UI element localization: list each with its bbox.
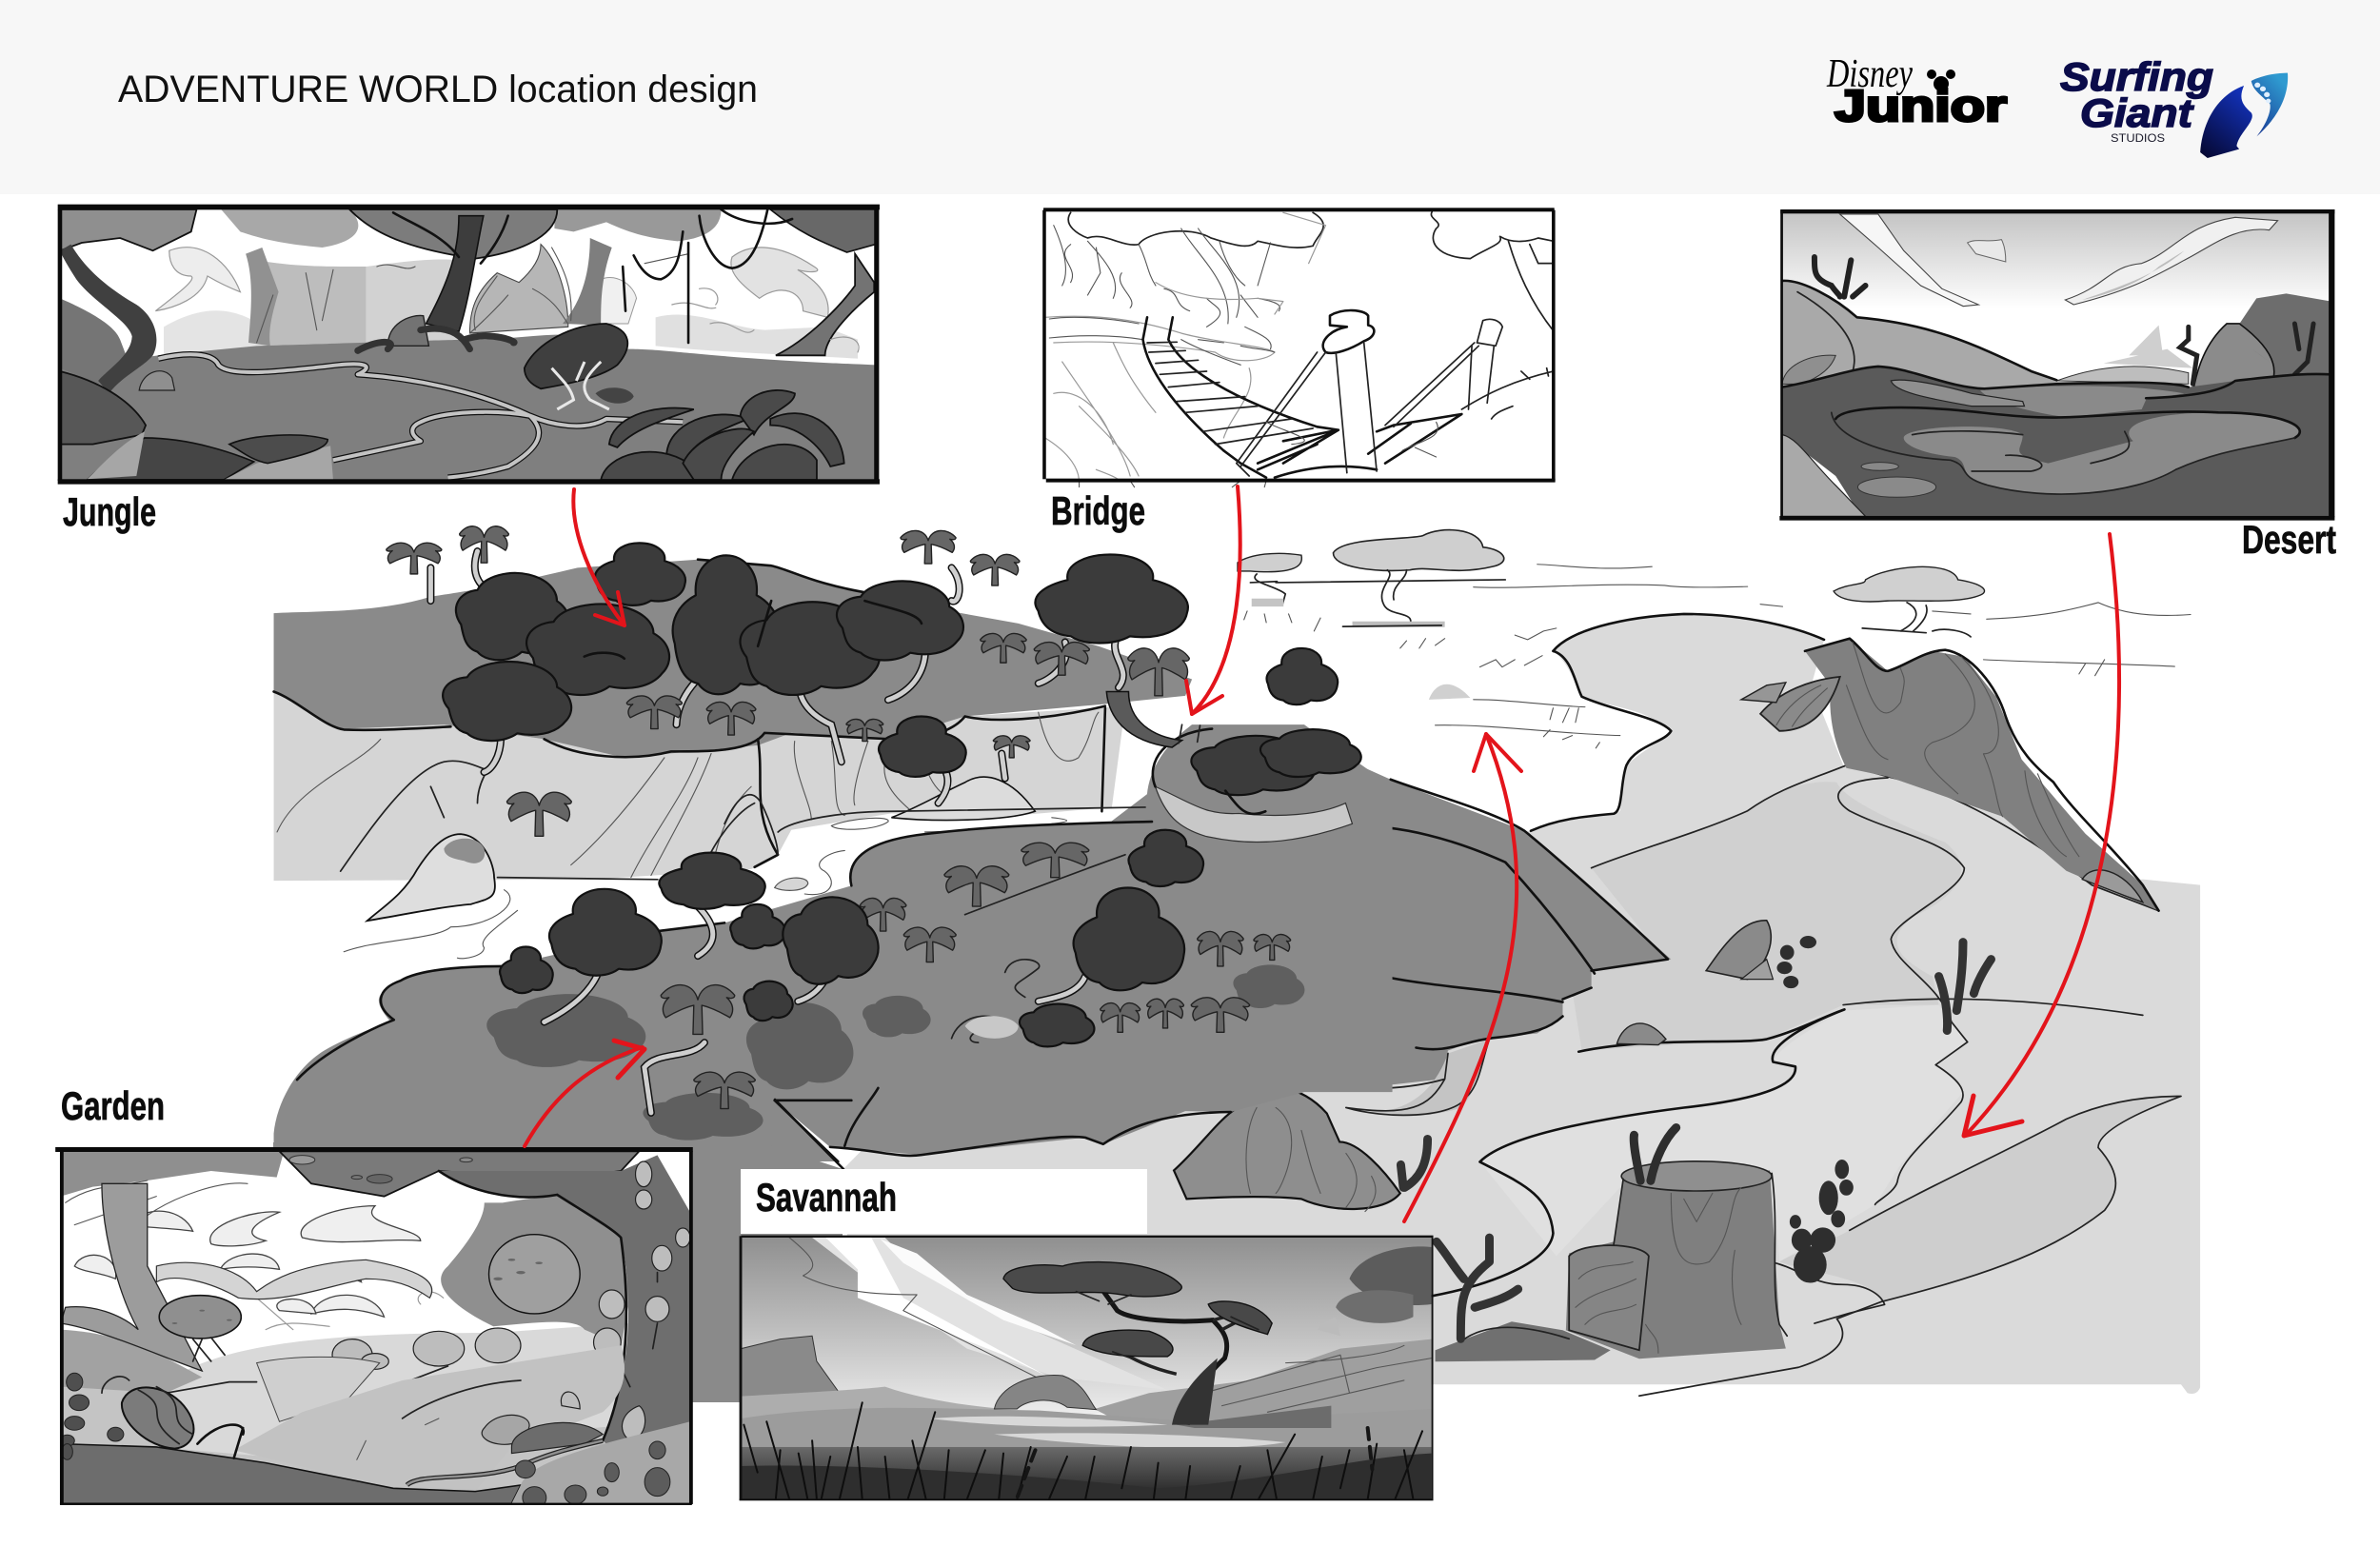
small rocks by cliff (1741, 677, 1840, 731)
label: Jungle: Jungle (63, 489, 156, 534)
label box: Savannah: Savannah (756, 1175, 897, 1220)
bridge frame (1042, 208, 1556, 483)
river ripples (344, 818, 1092, 959)
garden round fruit trees (489, 1235, 580, 1314)
title: ADVENTURE WORLD location design (118, 69, 758, 110)
background savannah tree small (1238, 553, 1505, 606)
garden trunks (61, 1183, 202, 1371)
garden bulb plants (332, 1161, 690, 1371)
right hillock bushes (1225, 791, 1265, 814)
arrow: desert (1964, 534, 2119, 1136)
garden swirling leaves (74, 1206, 421, 1317)
label: Bridge: Bridge (1051, 488, 1145, 533)
label: Desert: Desert (2242, 517, 2336, 562)
panel: main landscape map (273, 526, 2200, 1402)
gray hill below garden arrow (273, 1142, 843, 1402)
mid-gray foliage masses (486, 964, 1304, 1141)
label: Garden: Garden (61, 1083, 165, 1128)
background savannah tree right (1834, 566, 1985, 637)
panel: Garden (55, 1083, 693, 1509)
mid dune rock and stones (1616, 921, 1816, 1045)
label box: Savannah (741, 1169, 1147, 1234)
jungle canopies (221, 209, 358, 248)
garden pale ground (156, 1323, 630, 1457)
logo: Disney Junior: Disney (1826, 52, 1913, 96)
inner canopy detail (585, 601, 922, 659)
arrow: jungle (573, 489, 625, 625)
back plateau and garden hill (274, 526, 1393, 1161)
jungle trunks (246, 248, 279, 346)
logo: Surfing Giant Studios: Giant (2080, 90, 2194, 135)
logo: Surfing Giant Studios: Surfing (2060, 54, 2213, 99)
desert clouds (1840, 214, 1978, 307)
savannah right hills (1095, 1339, 1432, 1428)
central hill right part (1110, 725, 1671, 1087)
plateau foreground rocks (341, 761, 778, 880)
dark tree canopies (443, 543, 1361, 1046)
savannah left rocks (742, 1335, 838, 1397)
jungle frame (58, 205, 880, 485)
garden stump and ground path (257, 1357, 380, 1421)
cactus on dune line (1939, 942, 1991, 1031)
palm trees (387, 526, 1291, 1109)
sky horizon lines (1436, 565, 2191, 736)
arrow: bridge (1186, 486, 1240, 714)
arrow: garden (525, 1041, 645, 1146)
jungle big leaves plant (601, 390, 844, 480)
desert dark basin (1782, 367, 2331, 516)
bridge canopy and trees sketch (1068, 212, 1323, 248)
bridge posts (1323, 310, 1374, 353)
savannah distant dome tree (994, 1376, 1097, 1410)
plant beside savannah panel (1437, 1238, 1518, 1339)
rope bridge deck (1143, 317, 1318, 450)
logo: Surfing Giant Studios: STUDIOS (2111, 131, 2165, 145)
panel: Savannah (740, 1236, 1434, 1501)
desert left foreground rock (1782, 435, 1866, 516)
jungle rocks and stump (387, 315, 428, 346)
logo: Disney Junior (1826, 52, 2007, 130)
desert frame (1779, 209, 2334, 521)
garden frame (55, 1147, 693, 1505)
logo: Disney Junior: Junior (1835, 81, 2007, 130)
desert dunes area (843, 530, 2200, 1396)
jungle hanging vines (623, 209, 792, 343)
tree trunks (430, 551, 1123, 1113)
background savannah tree (1333, 530, 1504, 627)
jungle winding path (158, 354, 683, 478)
savannah main acacia tree (1003, 1262, 1272, 1425)
savannah frame (740, 1236, 1434, 1500)
desert cacti (1815, 257, 1866, 297)
savannah light streaks (812, 1238, 1146, 1380)
arrow: savannah (1404, 734, 1521, 1221)
jungle foliage outlines (672, 288, 859, 352)
panel: Desert (1779, 209, 2336, 562)
garden canopies (61, 1151, 284, 1197)
jungle light background foliage (731, 248, 828, 317)
garden left spotted column (60, 1373, 124, 1459)
jungle mushroom tree (525, 324, 627, 388)
logo: Surfing Giant Studios (2060, 54, 2288, 158)
desert right rocks (2239, 293, 2329, 375)
large rock formation (1805, 639, 2159, 911)
garden and central hill left part (274, 724, 1393, 1161)
garden bulb critters (482, 1415, 529, 1444)
tree stump (1436, 1127, 1787, 1361)
striped bridge rope (1106, 691, 1182, 747)
cactus cluster (1790, 1160, 1854, 1283)
garden dark foreground (61, 1444, 521, 1503)
garden watermelon (122, 1387, 244, 1458)
panel: Bridge (1042, 208, 1556, 533)
desert far hills (2104, 326, 2192, 368)
panel: Jungle (58, 205, 880, 534)
savannah midground (742, 1408, 1432, 1447)
savannah foreground grass (744, 1402, 1422, 1499)
header band (0, 0, 2380, 194)
boulder at foot of hill (1174, 1088, 1400, 1212)
cactus near boulder (1400, 1139, 1428, 1187)
